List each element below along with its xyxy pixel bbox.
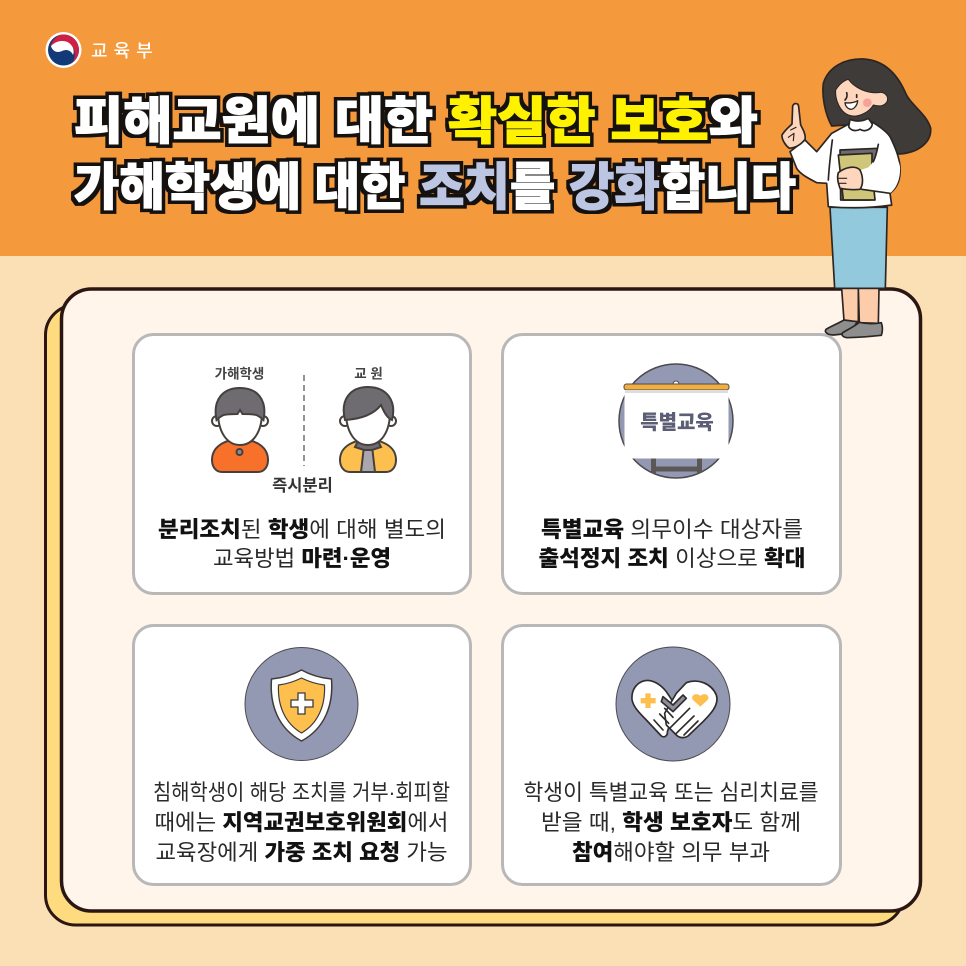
panel text: 분리조치된 학생에 대해 별도의 [158, 517, 446, 542]
face [836, 79, 888, 116]
panel: guardian participation [502, 626, 840, 884]
front card [62, 289, 920, 911]
panel: immediate separation [134, 334, 470, 594]
hair [823, 59, 931, 154]
label: teacher: 교 원 [354, 366, 383, 382]
book [840, 148, 878, 200]
title [74, 93, 796, 216]
panel text: 때에는 지역교권보호위원회에서 [154, 810, 449, 835]
legs [842, 288, 879, 323]
icon: student [212, 388, 268, 472]
panel: aggravated measures [134, 626, 470, 884]
folded arm sleeve [861, 144, 900, 193]
panel text: 참여해야할 의무 부과 [572, 840, 770, 865]
logo: ministry of education [46, 32, 159, 68]
label: immediate separation: 즉시분리 [272, 476, 333, 495]
panel text: 교육방법 마련·운영 [213, 546, 391, 571]
title line 1: 피해교원에 대한 확실한 보호와 [74, 93, 758, 150]
panel text: 교육장에게 가중 조치 요청 가능 [156, 840, 448, 865]
icon: heart hands [616, 647, 730, 761]
icon: taegeuk emblem [46, 32, 82, 68]
panel text: 학생이 특별교육 또는 심리치료를 [524, 780, 818, 805]
divider: dashed line [303, 375, 305, 466]
title line 2: 가해학생에 대한 조치를 강화합니다 [74, 159, 796, 216]
panel text [158, 517, 446, 571]
panel text: 출석정지 조치 이상으로 확대 [538, 546, 805, 571]
illustration: teacher pointing [782, 59, 931, 338]
icon: teacher [340, 387, 396, 472]
icon: shield [245, 648, 358, 760]
panel text: 침해학생이 해당 조치를 거부·회피할 [153, 780, 450, 805]
panel text [538, 517, 805, 571]
blush [863, 98, 872, 107]
label: student: 가해학생 [215, 366, 264, 382]
torso and raised arm [790, 122, 900, 208]
panel text: 받을 때, 학생 보호자도 함께 [541, 810, 801, 835]
shoes [825, 320, 857, 335]
facial features [845, 93, 857, 100]
icon: special education board [619, 364, 733, 480]
collar [849, 118, 872, 131]
board label: 특별교육 [640, 411, 714, 434]
skirt [830, 207, 887, 288]
logo wordmark: 교육부 [91, 41, 159, 61]
panel text [524, 780, 818, 865]
back card [46, 305, 904, 925]
hand on book [838, 167, 862, 190]
panel text: 특별교육 의무이수 대상자를 [541, 517, 803, 542]
raised hand [782, 104, 805, 148]
panel: special education [502, 334, 840, 594]
panel text [153, 780, 450, 865]
header band [0, 0, 966, 256]
